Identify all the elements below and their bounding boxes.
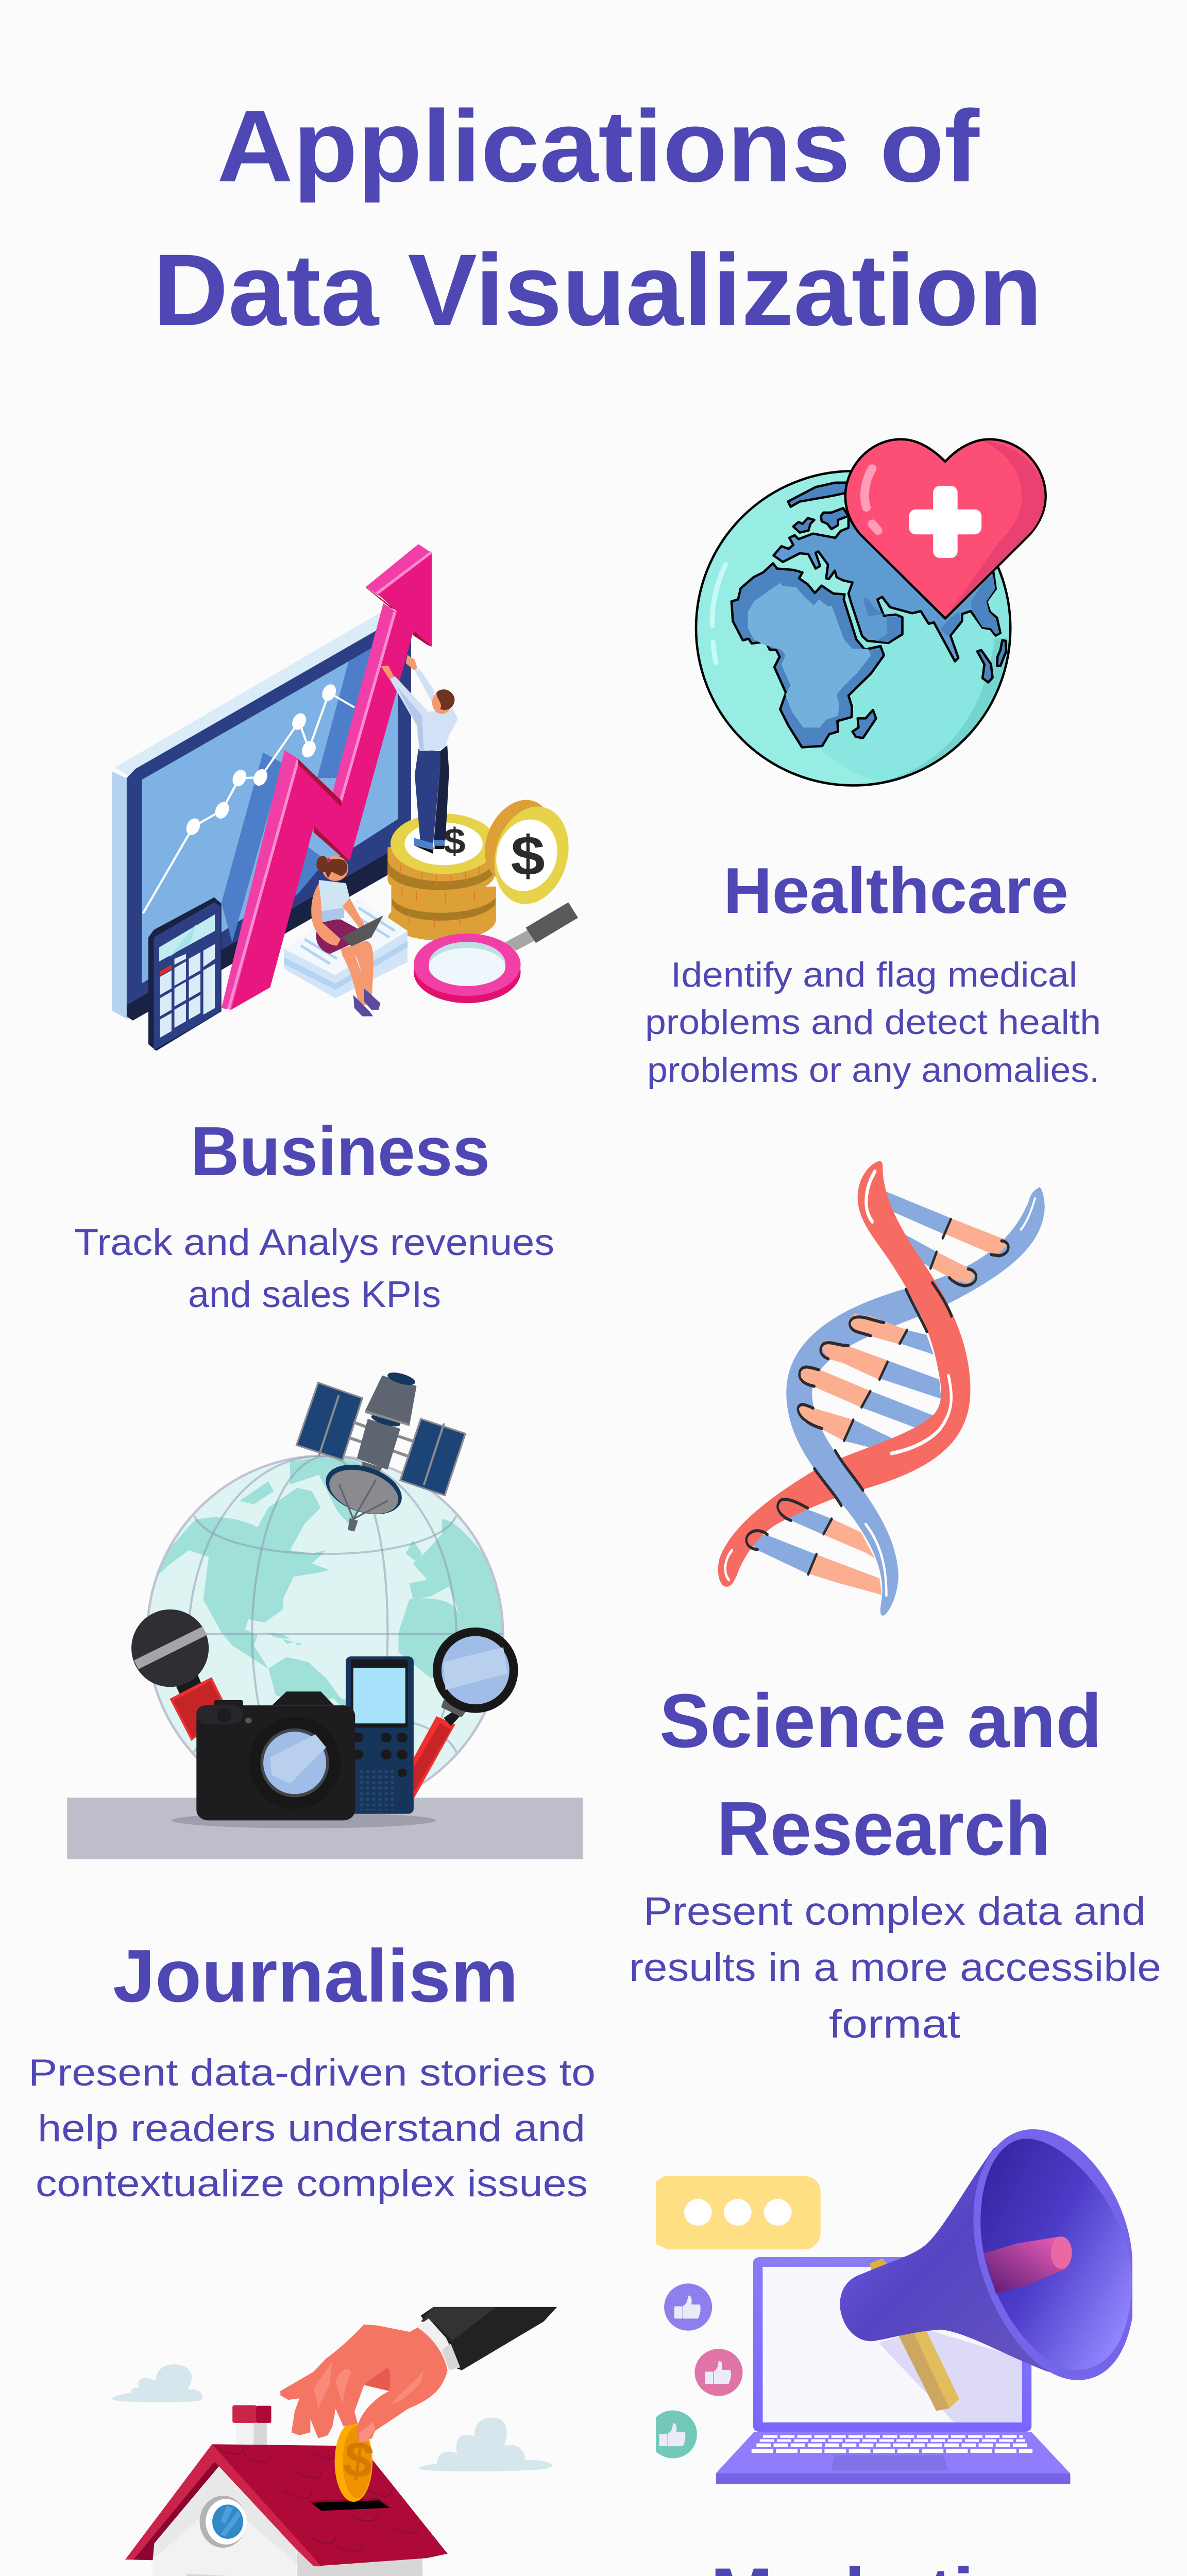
globe: [147, 1455, 503, 1812]
text block: business description: and sales KPIs: [188, 1274, 441, 1315]
title: [153, 89, 1042, 347]
magnifying glass: [414, 902, 578, 1003]
text block: journalism description: [28, 2052, 596, 2205]
coin stack: $: [444, 821, 466, 861]
standing coin: $: [511, 825, 545, 887]
heading: Science and Research: Research: [717, 1786, 1050, 1871]
text block: healthcare description: problems and detect health: [645, 1003, 1101, 1042]
monitor: [112, 612, 411, 1021]
text block: journalism description: contextualize complex issues: [36, 2163, 588, 2205]
text block: business description: [74, 1222, 554, 1315]
magnifier: [414, 1628, 518, 1799]
hand and sleeve: [280, 2307, 557, 2443]
round window: [200, 2496, 247, 2548]
person: man standing on coins: [381, 655, 458, 854]
laptop: [716, 2257, 1070, 2484]
illustration: house piggy bank with hand and coin: [108, 2307, 557, 2576]
like icons: [656, 2283, 743, 2458]
coin stack: [387, 814, 497, 941]
coin slot: [309, 2498, 392, 2511]
clouds: [108, 2364, 553, 2576]
illustration: laptop with megaphone: [656, 2129, 1132, 2484]
rungs: [746, 1191, 1007, 1595]
illustration: globe, satellite and reporting tools: [67, 1370, 583, 1859]
roof: [125, 2444, 448, 2566]
calculator: [148, 897, 222, 1051]
text block: science description: [629, 1889, 1161, 2046]
speech bubble: [656, 2176, 821, 2249]
illustration: business chart with growth arrow: [112, 544, 578, 1051]
title: Applications of: [217, 89, 980, 203]
text block: science description: Present complex data and: [643, 1889, 1146, 1934]
person: woman with laptop: [311, 856, 383, 1016]
heading: Business: Business: [191, 1112, 490, 1190]
microphone: [131, 1609, 229, 1741]
icon: heart: [845, 439, 1046, 619]
heading: Healthcare: Healthcare: [723, 854, 1069, 927]
heading: Journalism: Journalism: [113, 1934, 518, 2018]
text block: science description: format: [829, 2002, 960, 2046]
heading: Science and Research: Science and: [659, 1679, 1102, 1764]
panel: business: [74, 544, 578, 1315]
panel: real estate: [77, 2307, 573, 2576]
chimney: [232, 2405, 272, 2446]
coin: $: [340, 2430, 377, 2489]
camera: [196, 1691, 355, 1820]
highlights: [725, 1172, 1035, 1596]
house walls: [152, 2468, 425, 2576]
papers: [284, 898, 408, 998]
panel: healthcare: [645, 439, 1101, 1090]
text block: healthcare description: problems or any anomalies.: [647, 1050, 1099, 1090]
text block: journalism description: help readers understand and: [38, 2108, 585, 2149]
icon: globe with medical heart: [696, 439, 1046, 786]
ground: [67, 1798, 583, 1859]
voice recorder: [346, 1656, 414, 1814]
panel: journalism: [28, 1370, 596, 2205]
standing coin: [473, 791, 578, 910]
arrow: [222, 544, 432, 1010]
coin: [335, 2422, 377, 2502]
text block: science description: results in a more accessible: [629, 1945, 1161, 1990]
dark marks: [747, 1219, 1008, 1574]
illustration: DNA helix: [718, 1161, 1045, 1616]
megaphone: [840, 2129, 1132, 2411]
text block: healthcare description: [645, 955, 1101, 1090]
text block: healthcare description: Identify and flag medical: [671, 955, 1077, 994]
panel: marketing: [624, 2129, 1152, 2576]
panel: science and research: [629, 1161, 1161, 2046]
text block: business description: Track and Analys revenues: [74, 1222, 554, 1263]
text block: journalism description: Present data-driven stories to: [28, 2052, 596, 2094]
satellite: [297, 1370, 465, 1532]
title: Data Visualization: [153, 233, 1042, 347]
heading: Science and Research: [659, 1679, 1102, 1871]
